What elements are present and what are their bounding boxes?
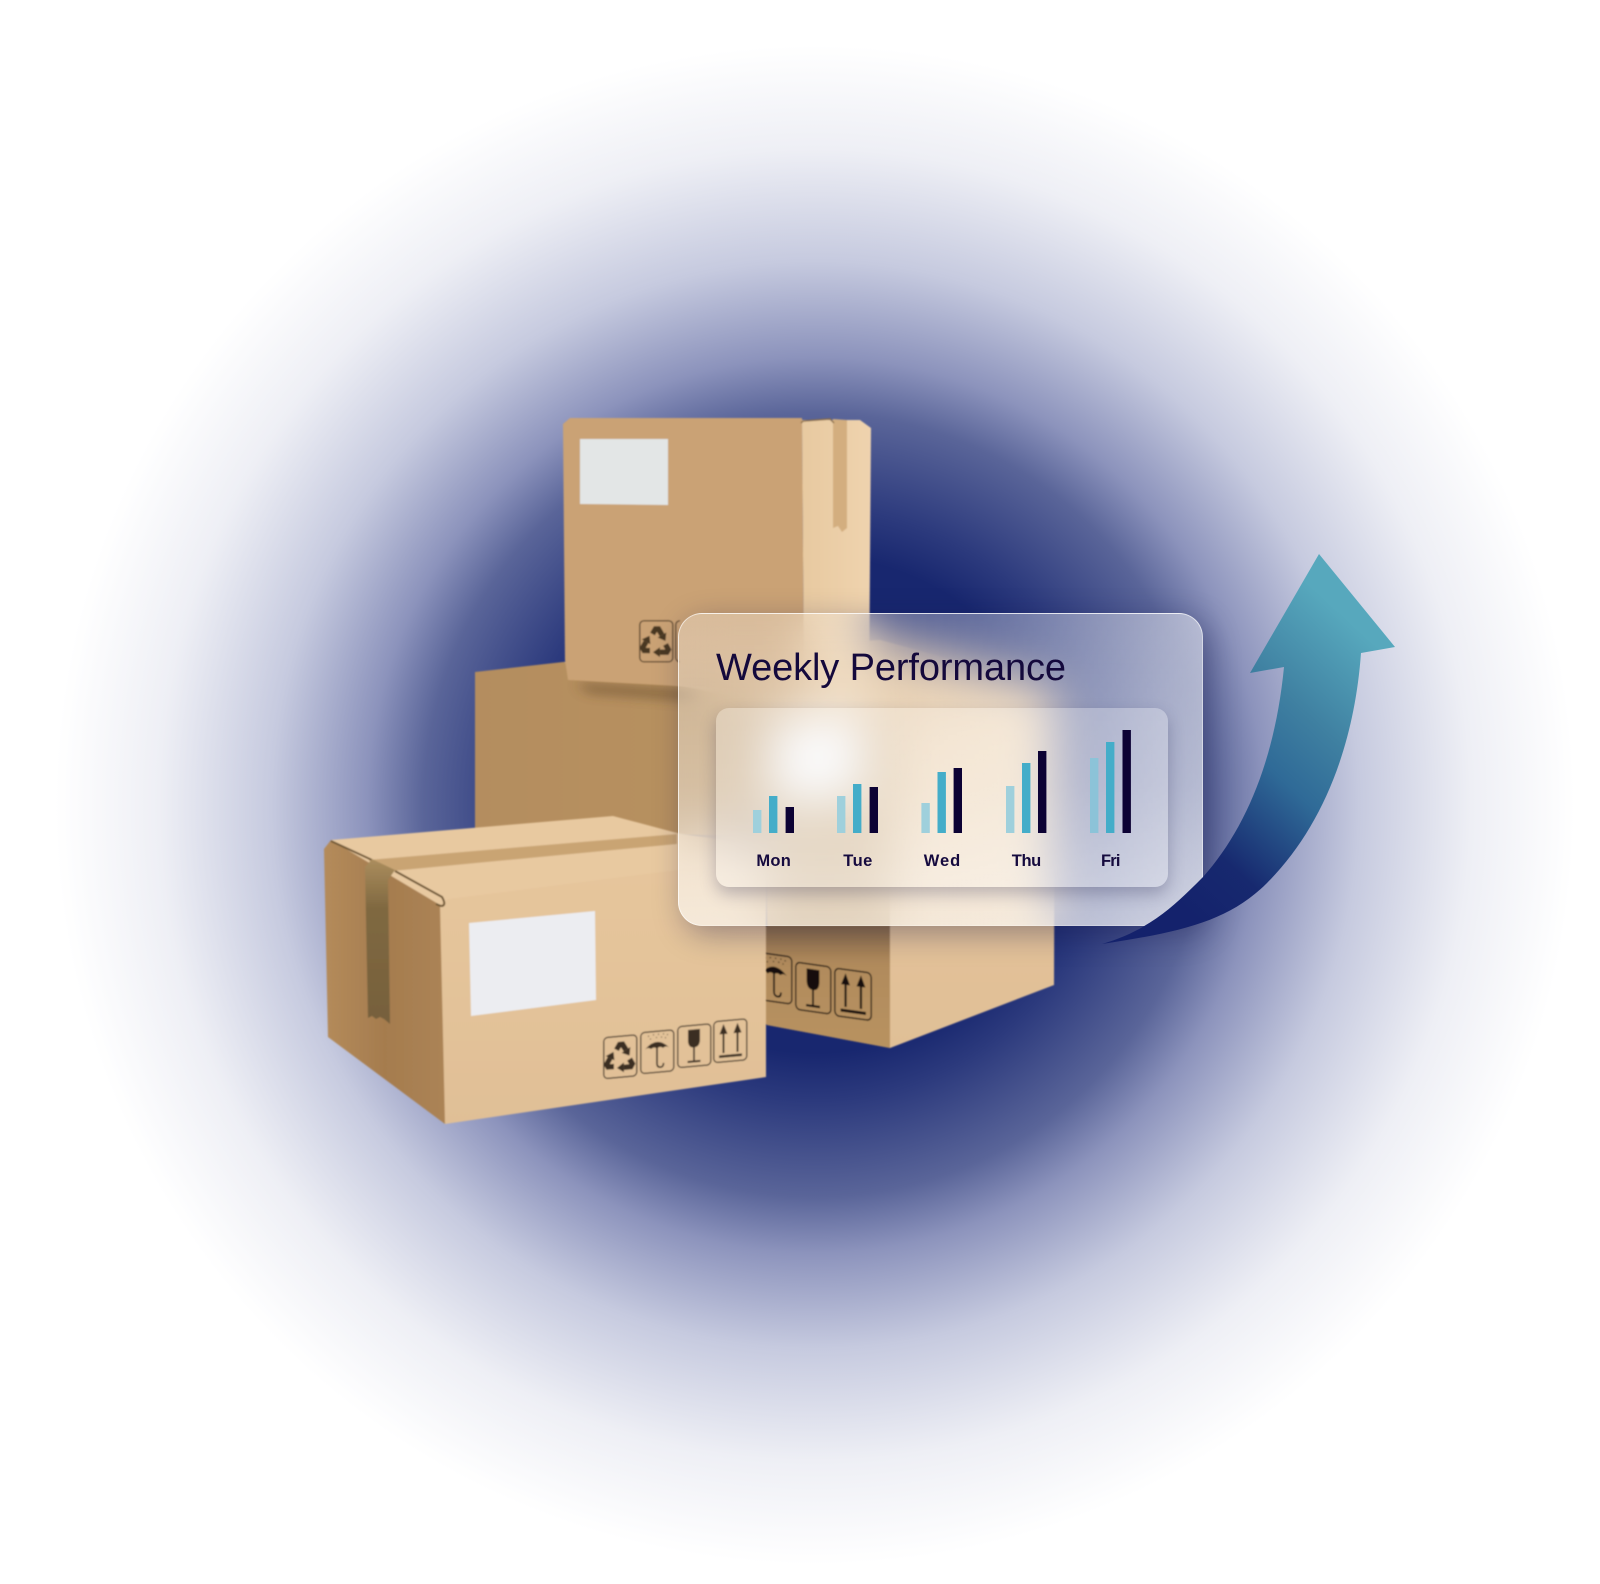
axis labels: [756, 852, 1120, 870]
icon: middle box handling marks: [757, 952, 871, 1021]
bars: Mon: [753, 796, 794, 833]
bottom box right face: [440, 850, 766, 1124]
axis labels: Tue: [843, 852, 872, 870]
panel: inner chart panel: [716, 708, 1168, 887]
middle box lower front shaded strip: [760, 926, 890, 1048]
icon: bottom box handling marks: [603, 1019, 747, 1079]
axis labels: Fri: [1101, 852, 1120, 870]
bar chart: weekly performance: [753, 730, 1131, 870]
top box right face: [802, 420, 871, 700]
panel: frosted glass card: [678, 613, 1203, 926]
axis labels: Wed: [924, 852, 960, 870]
top box front face: [563, 418, 804, 690]
bottom box shipping label: [469, 911, 596, 1016]
arrow: upward growth arrow: [1102, 554, 1395, 944]
axis labels: Mon: [756, 852, 791, 870]
icon: top box recycle mark: [639, 621, 673, 662]
top box neighbouring mark edge: [674, 620, 680, 663]
middle box hidden label: [770, 715, 865, 805]
middle box front face: [475, 662, 900, 1048]
bottom box top tape: [368, 834, 677, 871]
bottom box left face: [324, 840, 445, 1124]
bottom box top face: [331, 816, 790, 905]
title: Weekly Performance: [716, 647, 1066, 689]
bottom box lid slit: [331, 841, 444, 906]
bars: Wed: [921, 768, 962, 833]
box: bottom cardboard box: [324, 816, 790, 1124]
top box contact shadow: [575, 684, 700, 700]
bars: Tue: [837, 784, 878, 833]
bars: Thu: [1006, 751, 1046, 833]
top box tape: [833, 419, 847, 532]
bars: Fri: [1090, 730, 1131, 833]
box: middle cardboard box: [475, 640, 1055, 1048]
bottom box side tape: [365, 859, 395, 1024]
middle box right face: [890, 688, 1055, 1048]
middle box top face: [563, 640, 1055, 728]
box: top cardboard box: [563, 418, 871, 700]
axis labels: Thu: [1012, 852, 1041, 870]
illustration: background glow and cardboard boxes: [104, 94, 1526, 1516]
top box shipping label: [580, 439, 668, 505]
